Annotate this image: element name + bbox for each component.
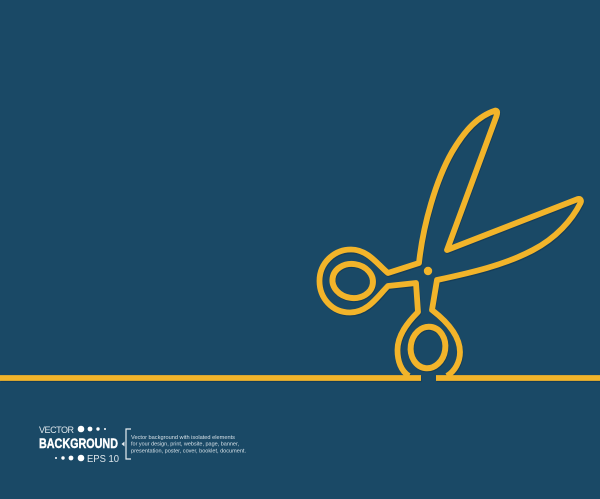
description text: Vector background with isolated elements bbox=[131, 435, 235, 441]
dots top bbox=[78, 426, 106, 432]
pivot dot bbox=[424, 267, 432, 275]
description text bbox=[131, 435, 246, 454]
description text: presentation, poster, cover, booklet, document. bbox=[131, 448, 246, 454]
description text: for your design, print, website, page, banner, bbox=[131, 442, 239, 448]
text: BACKGROUND: BACKGROUND bbox=[39, 436, 118, 451]
icon: scissors on continuous line bbox=[0, 110, 600, 379]
scissors outline bbox=[320, 110, 581, 376]
line shadow bbox=[1, 112, 600, 379]
dots bottom bbox=[55, 455, 84, 461]
logo block bbox=[39, 425, 246, 465]
text: VECTOR: VECTOR bbox=[39, 425, 74, 435]
bracket arrow bbox=[122, 442, 124, 446]
bracket bbox=[126, 429, 131, 459]
baseline left and right bbox=[0, 375, 600, 381]
bottom finger hole bbox=[408, 324, 448, 371]
text: EPS 10: EPS 10 bbox=[87, 454, 119, 465]
left finger hole bbox=[330, 261, 375, 301]
